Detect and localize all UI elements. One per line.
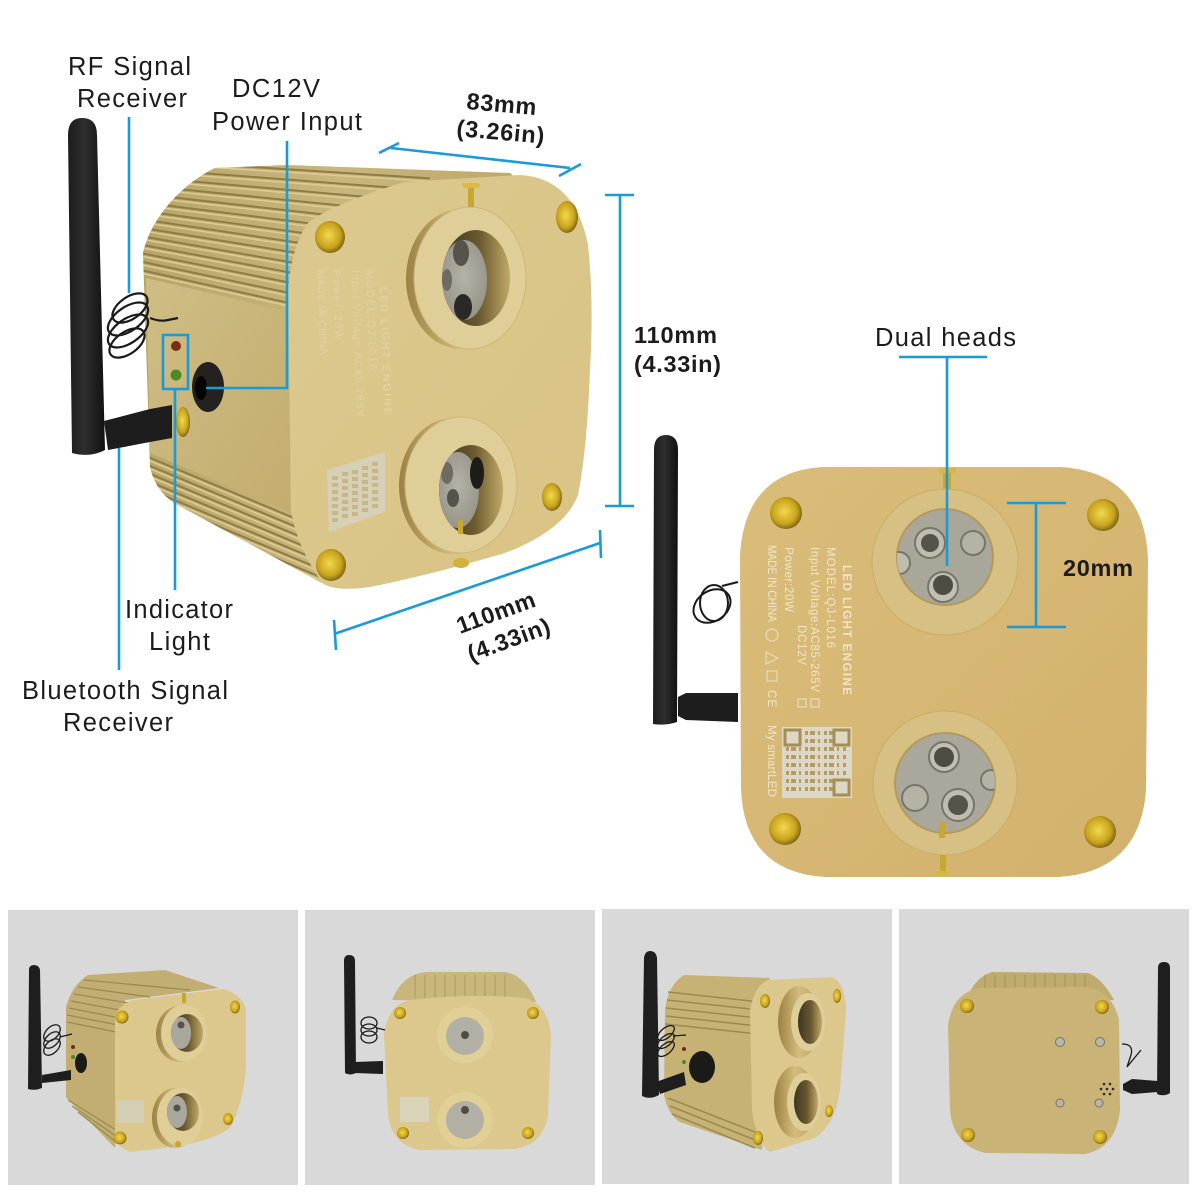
corner screws	[769, 497, 1119, 848]
QR code	[782, 727, 852, 798]
label: Indicator Light: Light	[149, 628, 210, 656]
QR code	[327, 452, 385, 532]
thumbnail panel 2: front view	[305, 910, 595, 1185]
printed specification text: Input Voltage:AC85-265V	[349, 270, 366, 417]
printed label text: Input Voltage:AC85-265V	[808, 547, 820, 692]
silver fasteners	[1056, 1038, 1104, 1107]
wire loop	[687, 582, 738, 630]
screws	[114, 1000, 240, 1144]
printed label text: My smartLED	[765, 725, 777, 797]
label: DC12V Power Input	[206, 75, 362, 388]
power jack	[689, 1051, 715, 1083]
wire coil	[655, 1023, 686, 1059]
front plate	[750, 977, 846, 1152]
LEDs and power jack	[71, 1045, 87, 1073]
front plate	[384, 996, 551, 1150]
dimension: 20mm	[1007, 503, 1133, 627]
label: RF Signal Receiver	[68, 53, 191, 293]
top pin	[938, 468, 956, 493]
printed specification text: LED LIGHT ENGINE	[377, 287, 393, 415]
label: RF Signal Receiver: Receiver	[77, 85, 188, 113]
front plate	[740, 467, 1148, 877]
dimension: 20mm: 20mm	[1063, 555, 1133, 581]
printed specification text: MADE IN CHINA	[314, 270, 329, 355]
back plate	[948, 987, 1120, 1154]
screws	[753, 989, 841, 1145]
antenna	[642, 951, 686, 1098]
antenna	[653, 435, 738, 725]
label: Indicator Light: Indicator	[125, 596, 234, 624]
front plate	[115, 989, 246, 1152]
antenna	[344, 955, 383, 1074]
label: DC12V Power Input: Power Input	[212, 108, 362, 136]
main product: angled view	[68, 118, 592, 589]
leader line: bluetooth	[118, 448, 120, 670]
wire coil	[361, 1017, 385, 1043]
bottom lens ring	[873, 711, 1017, 875]
leader line: power	[206, 141, 287, 388]
RF wire coil	[102, 288, 178, 363]
dimension: depth 83mm: 83mm	[466, 88, 538, 120]
QR code	[400, 1097, 429, 1122]
label: Dual heads	[875, 324, 1016, 566]
printed specification text: Power:20W	[330, 270, 344, 340]
printed label text: CE	[765, 690, 777, 707]
printed specification text: MODEL:QJ-L016	[363, 270, 378, 370]
indicator highlight box	[163, 335, 188, 389]
thumbnail panel 1: angled view	[8, 910, 298, 1185]
wire coil	[41, 1022, 72, 1058]
label: Bluetooth Signal Receiver	[22, 448, 228, 737]
dimension: height 110mm: 110mm	[634, 322, 717, 348]
top of body	[392, 972, 536, 1002]
antenna	[28, 965, 71, 1090]
leader line: RF	[128, 117, 130, 293]
dimension: height 110mm: (4.33in)	[634, 351, 721, 377]
leader line: dual heads	[899, 357, 987, 566]
label: Bluetooth Signal Receiver: Bluetooth Signal	[22, 677, 228, 705]
antenna	[1123, 962, 1170, 1095]
printed label text	[765, 545, 852, 797]
QR code	[117, 1100, 144, 1123]
right product: front view	[653, 435, 1148, 877]
printed label text: MODEL:QJ-L016	[824, 547, 836, 648]
dimension: width 110mm: 110mm	[453, 586, 539, 639]
speaker vents	[1100, 1083, 1114, 1095]
thumbnail panel 3: side view	[602, 909, 892, 1184]
screws	[960, 999, 1109, 1144]
leader line: indicator	[174, 389, 176, 590]
printed label text: MADE IN CHINA	[765, 545, 777, 622]
label: RF Signal Receiver: RF Signal	[68, 53, 191, 81]
printed label text: DC12V	[795, 625, 807, 665]
printed label text: Power:20W	[782, 547, 794, 612]
label: Indicator Light	[125, 389, 234, 656]
dimension: depth 83mm	[379, 88, 581, 176]
label: DC12V Power Input: DC12V	[232, 75, 320, 103]
side of body	[66, 970, 219, 1148]
printed specification text	[314, 270, 393, 417]
screws	[394, 1007, 539, 1139]
label: Dual heads: Dual heads	[875, 324, 1016, 352]
top of body	[966, 972, 1114, 1000]
label: Bluetooth Signal Receiver: Receiver	[63, 709, 174, 737]
dimension: width 110mm	[334, 530, 601, 667]
side of body	[664, 975, 770, 1150]
dimension: height 110mm	[605, 195, 721, 506]
dimension: depth 83mm: (3.26in)	[456, 115, 545, 149]
top lens ring	[872, 489, 1018, 635]
device body	[143, 160, 592, 589]
printed label text: LED LIGHT ENGINE	[840, 565, 852, 695]
LEDs	[682, 1047, 686, 1064]
dimension: width 110mm: (4.33in)	[464, 613, 554, 667]
wire	[1122, 1044, 1141, 1067]
lens rings	[437, 1007, 493, 1148]
lens rings	[152, 993, 207, 1148]
certification icons	[766, 629, 819, 707]
antenna	[68, 118, 172, 455]
lens rings	[774, 986, 825, 1138]
thumbnail panel 4: back view	[899, 909, 1189, 1184]
